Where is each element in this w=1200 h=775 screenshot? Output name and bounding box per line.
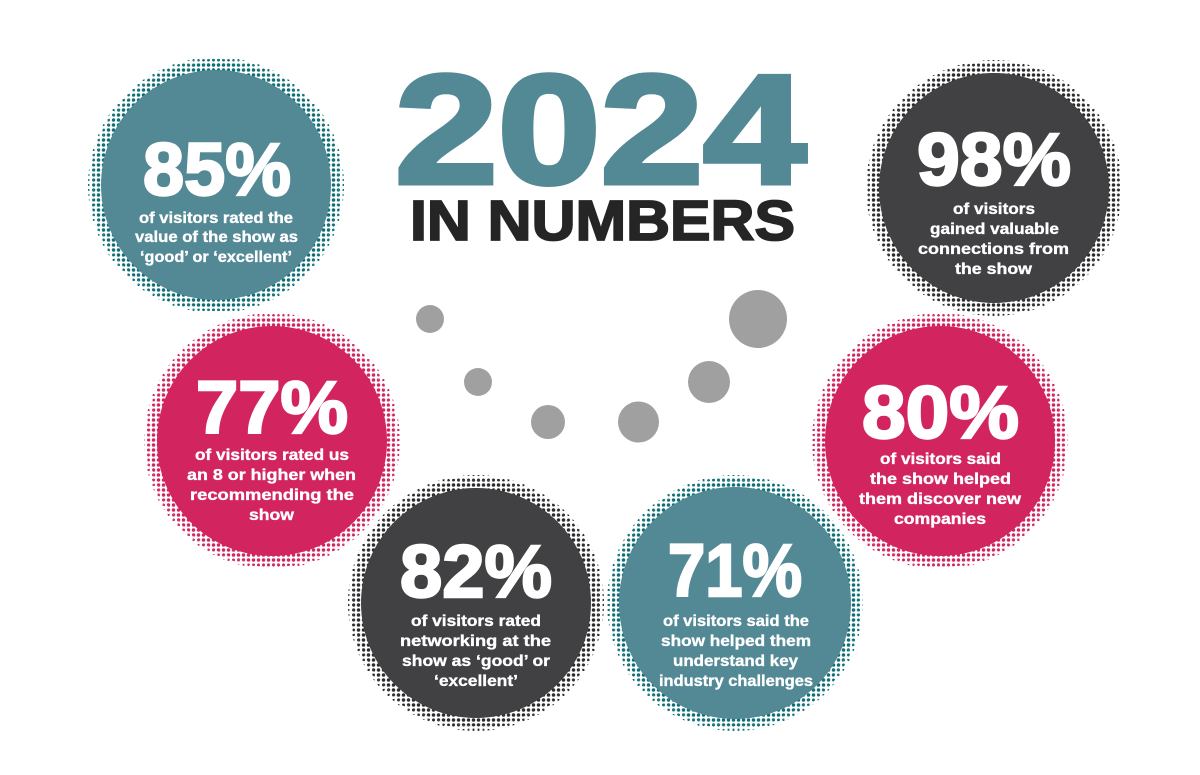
- stat bubble: 85%: ‘good’ or ‘excellent’: [140, 249, 292, 266]
- title: 2024: 2024: [395, 43, 806, 216]
- stat bubble: 71%: of visitors said the: [663, 613, 809, 630]
- decorative grey bubble arc: [416, 290, 787, 442]
- stat bubble: 85%: value of the show as: [135, 229, 298, 246]
- stat bubble: 71%: show helped them: [661, 633, 811, 650]
- stat bubble: 80%: companies: [894, 511, 986, 528]
- stat bubble: 71%: understand key: [673, 653, 798, 670]
- stat bubble: 71%: 71%: [668, 529, 802, 612]
- stat bubble: 82%: ‘excellent’: [434, 673, 518, 690]
- stat bubble: 77%: an 8 or higher when: [187, 467, 356, 484]
- stat bubble: 80%: [812, 313, 1068, 569]
- stat bubble: 77%: [144, 313, 400, 569]
- stat bubble: 85%: 85%: [143, 128, 291, 211]
- stat bubble: 82%: networking at the: [400, 633, 551, 650]
- subtitle: in numbers: IN NUMBERS: [410, 189, 795, 253]
- stat bubble: 80%: 80%: [862, 371, 1019, 454]
- stat bubble: 80%: them discover new: [859, 491, 1022, 508]
- stat bubble: 82%: 82%: [400, 530, 552, 613]
- stat bubble: 71%: [607, 475, 863, 731]
- stat bubble: 85%: [88, 57, 344, 313]
- stat bubble: 98%: 98%: [917, 118, 1071, 201]
- stat bubble: 98%: gained valuable: [930, 221, 1059, 238]
- stat bubble: 82%: [348, 475, 604, 731]
- stat bubble: 80%: of visitors said: [880, 451, 1001, 468]
- stat bubble: 82%: of visitors rated: [411, 613, 541, 630]
- stat bubble: 98%: the show: [955, 261, 1033, 278]
- stat bubble: 77%: recommending the: [190, 487, 354, 504]
- stat bubble: 77%: show: [249, 507, 295, 524]
- stat bubble: 77%: of visitors rated us: [195, 447, 349, 464]
- stat bubble: 98%: connections from: [918, 241, 1069, 258]
- stat bubble: 82%: show as ‘good’ or: [402, 653, 550, 670]
- stat bubble: 71%: industry challenges: [659, 673, 813, 690]
- stat bubble: 85%: of visitors rated the: [139, 210, 293, 227]
- stat bubble: 98%: [866, 60, 1122, 316]
- stat bubble: 80%: the show helped: [870, 471, 1011, 488]
- stat bubble: 98%: of visitors: [953, 201, 1035, 218]
- stat bubble: 77%: 77%: [196, 366, 348, 449]
